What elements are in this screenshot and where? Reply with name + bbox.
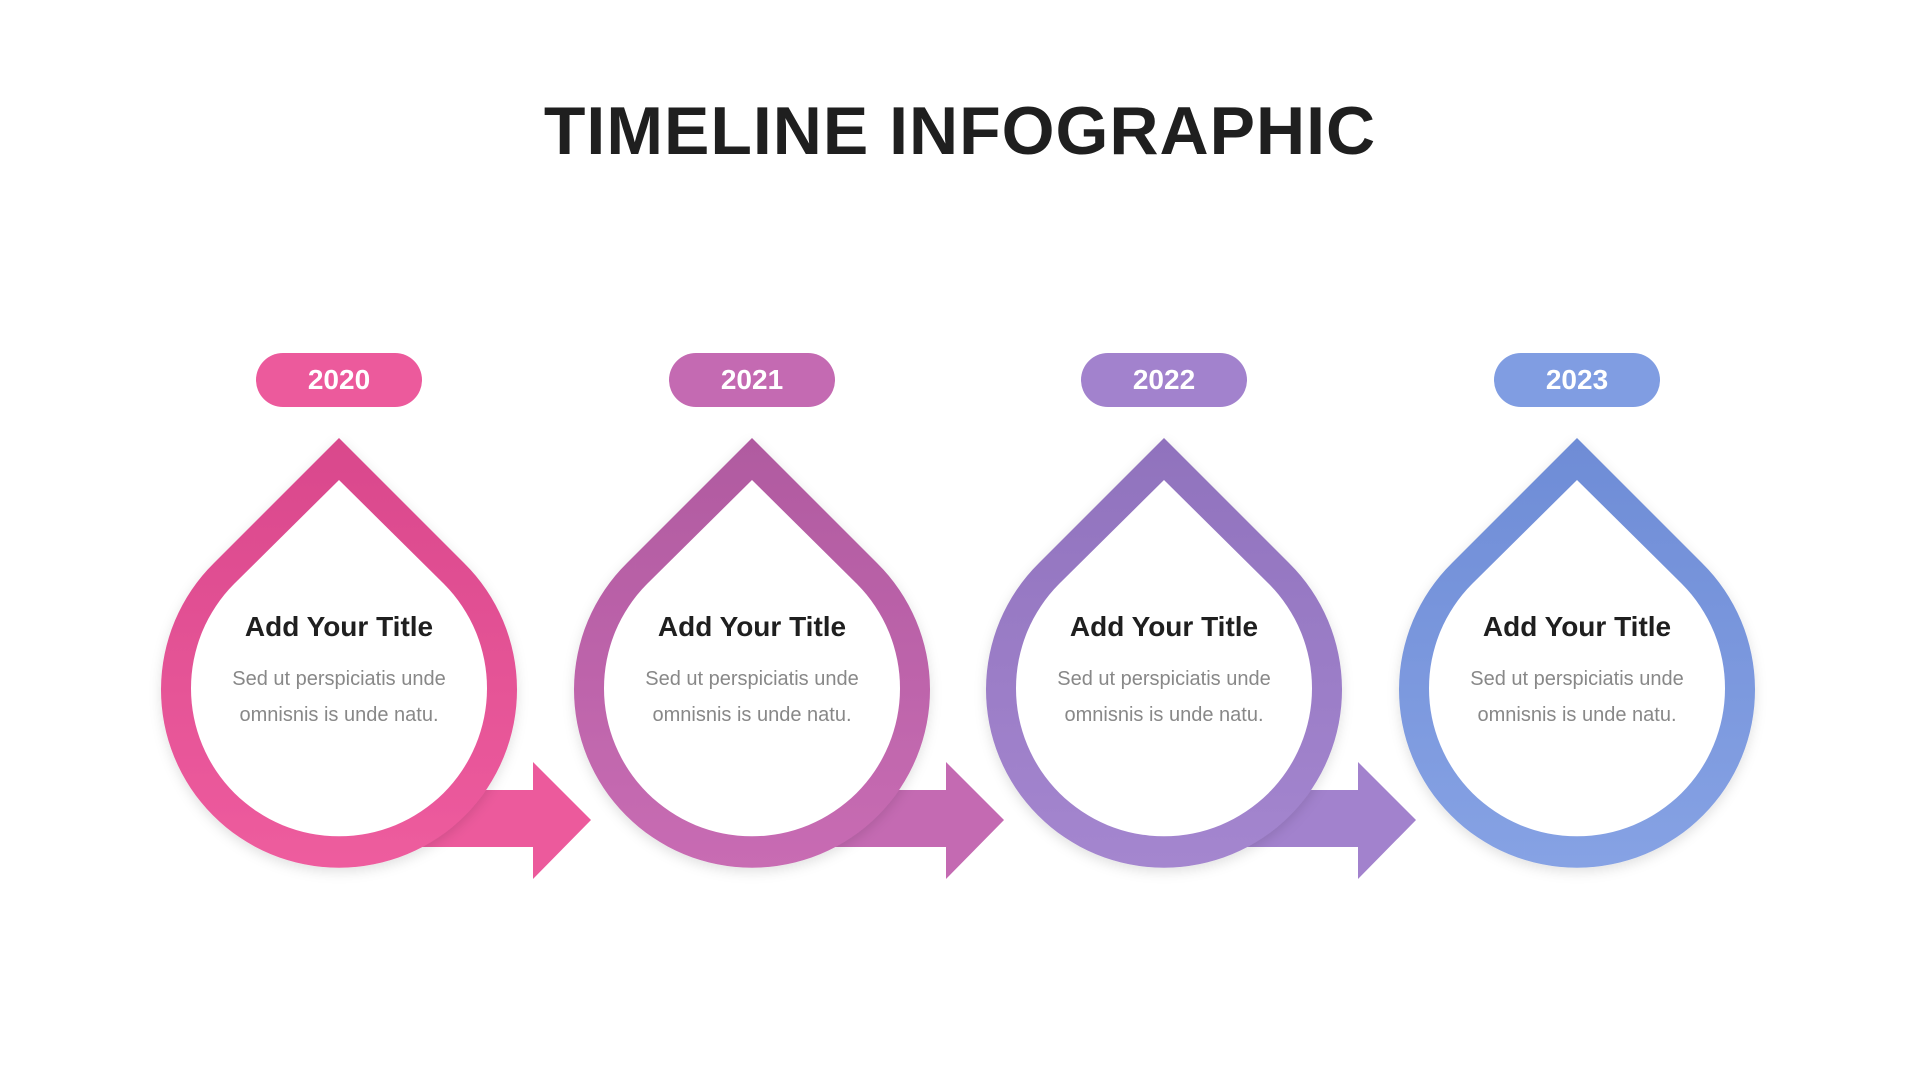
text 2023	[1470, 611, 1684, 726]
arrow 2020	[399, 762, 591, 879]
step 2020	[161, 353, 591, 879]
text 2023: omnisnis is unde natu.	[1477, 704, 1677, 726]
text 2021: omnisnis is unde natu.	[652, 704, 852, 726]
step 2023	[1399, 353, 1755, 868]
year pill 2023: 2023	[1546, 364, 1608, 395]
year pill 2022	[1081, 353, 1247, 407]
text 2020: Add Your Title	[245, 611, 433, 642]
title: TIMELINE INFOGRAPHIC	[544, 93, 1376, 169]
arrow 2021	[812, 762, 1004, 879]
drop ring 2022	[986, 438, 1342, 868]
year pill 2023	[1494, 353, 1660, 407]
text 2020	[232, 611, 446, 726]
drop ring 2020	[161, 438, 517, 868]
step 2021	[574, 353, 1004, 879]
year pill 2020: 2020	[308, 364, 370, 395]
text 2020: omnisnis is unde natu.	[239, 704, 439, 726]
text 2023: Add Your Title	[1483, 611, 1671, 642]
text 2022: omnisnis is unde natu.	[1064, 704, 1264, 726]
text 2021: Sed ut perspiciatis unde	[645, 668, 859, 690]
year pill 2020	[256, 353, 422, 407]
text 2022: Sed ut perspiciatis unde	[1057, 668, 1271, 690]
year pill 2021: 2021	[721, 364, 783, 395]
year pill 2021	[669, 353, 835, 407]
text 2023: Sed ut perspiciatis unde	[1470, 668, 1684, 690]
text 2022	[1057, 611, 1271, 726]
text 2021	[645, 611, 859, 726]
step 2022	[986, 353, 1416, 879]
year pill 2022: 2022	[1133, 364, 1195, 395]
arrow 2022	[1224, 762, 1416, 879]
drop ring 2021	[574, 438, 930, 868]
text 2022: Add Your Title	[1070, 611, 1258, 642]
drop ring 2023	[1399, 438, 1755, 868]
text 2020: Sed ut perspiciatis unde	[232, 668, 446, 690]
text 2021: Add Your Title	[658, 611, 846, 642]
